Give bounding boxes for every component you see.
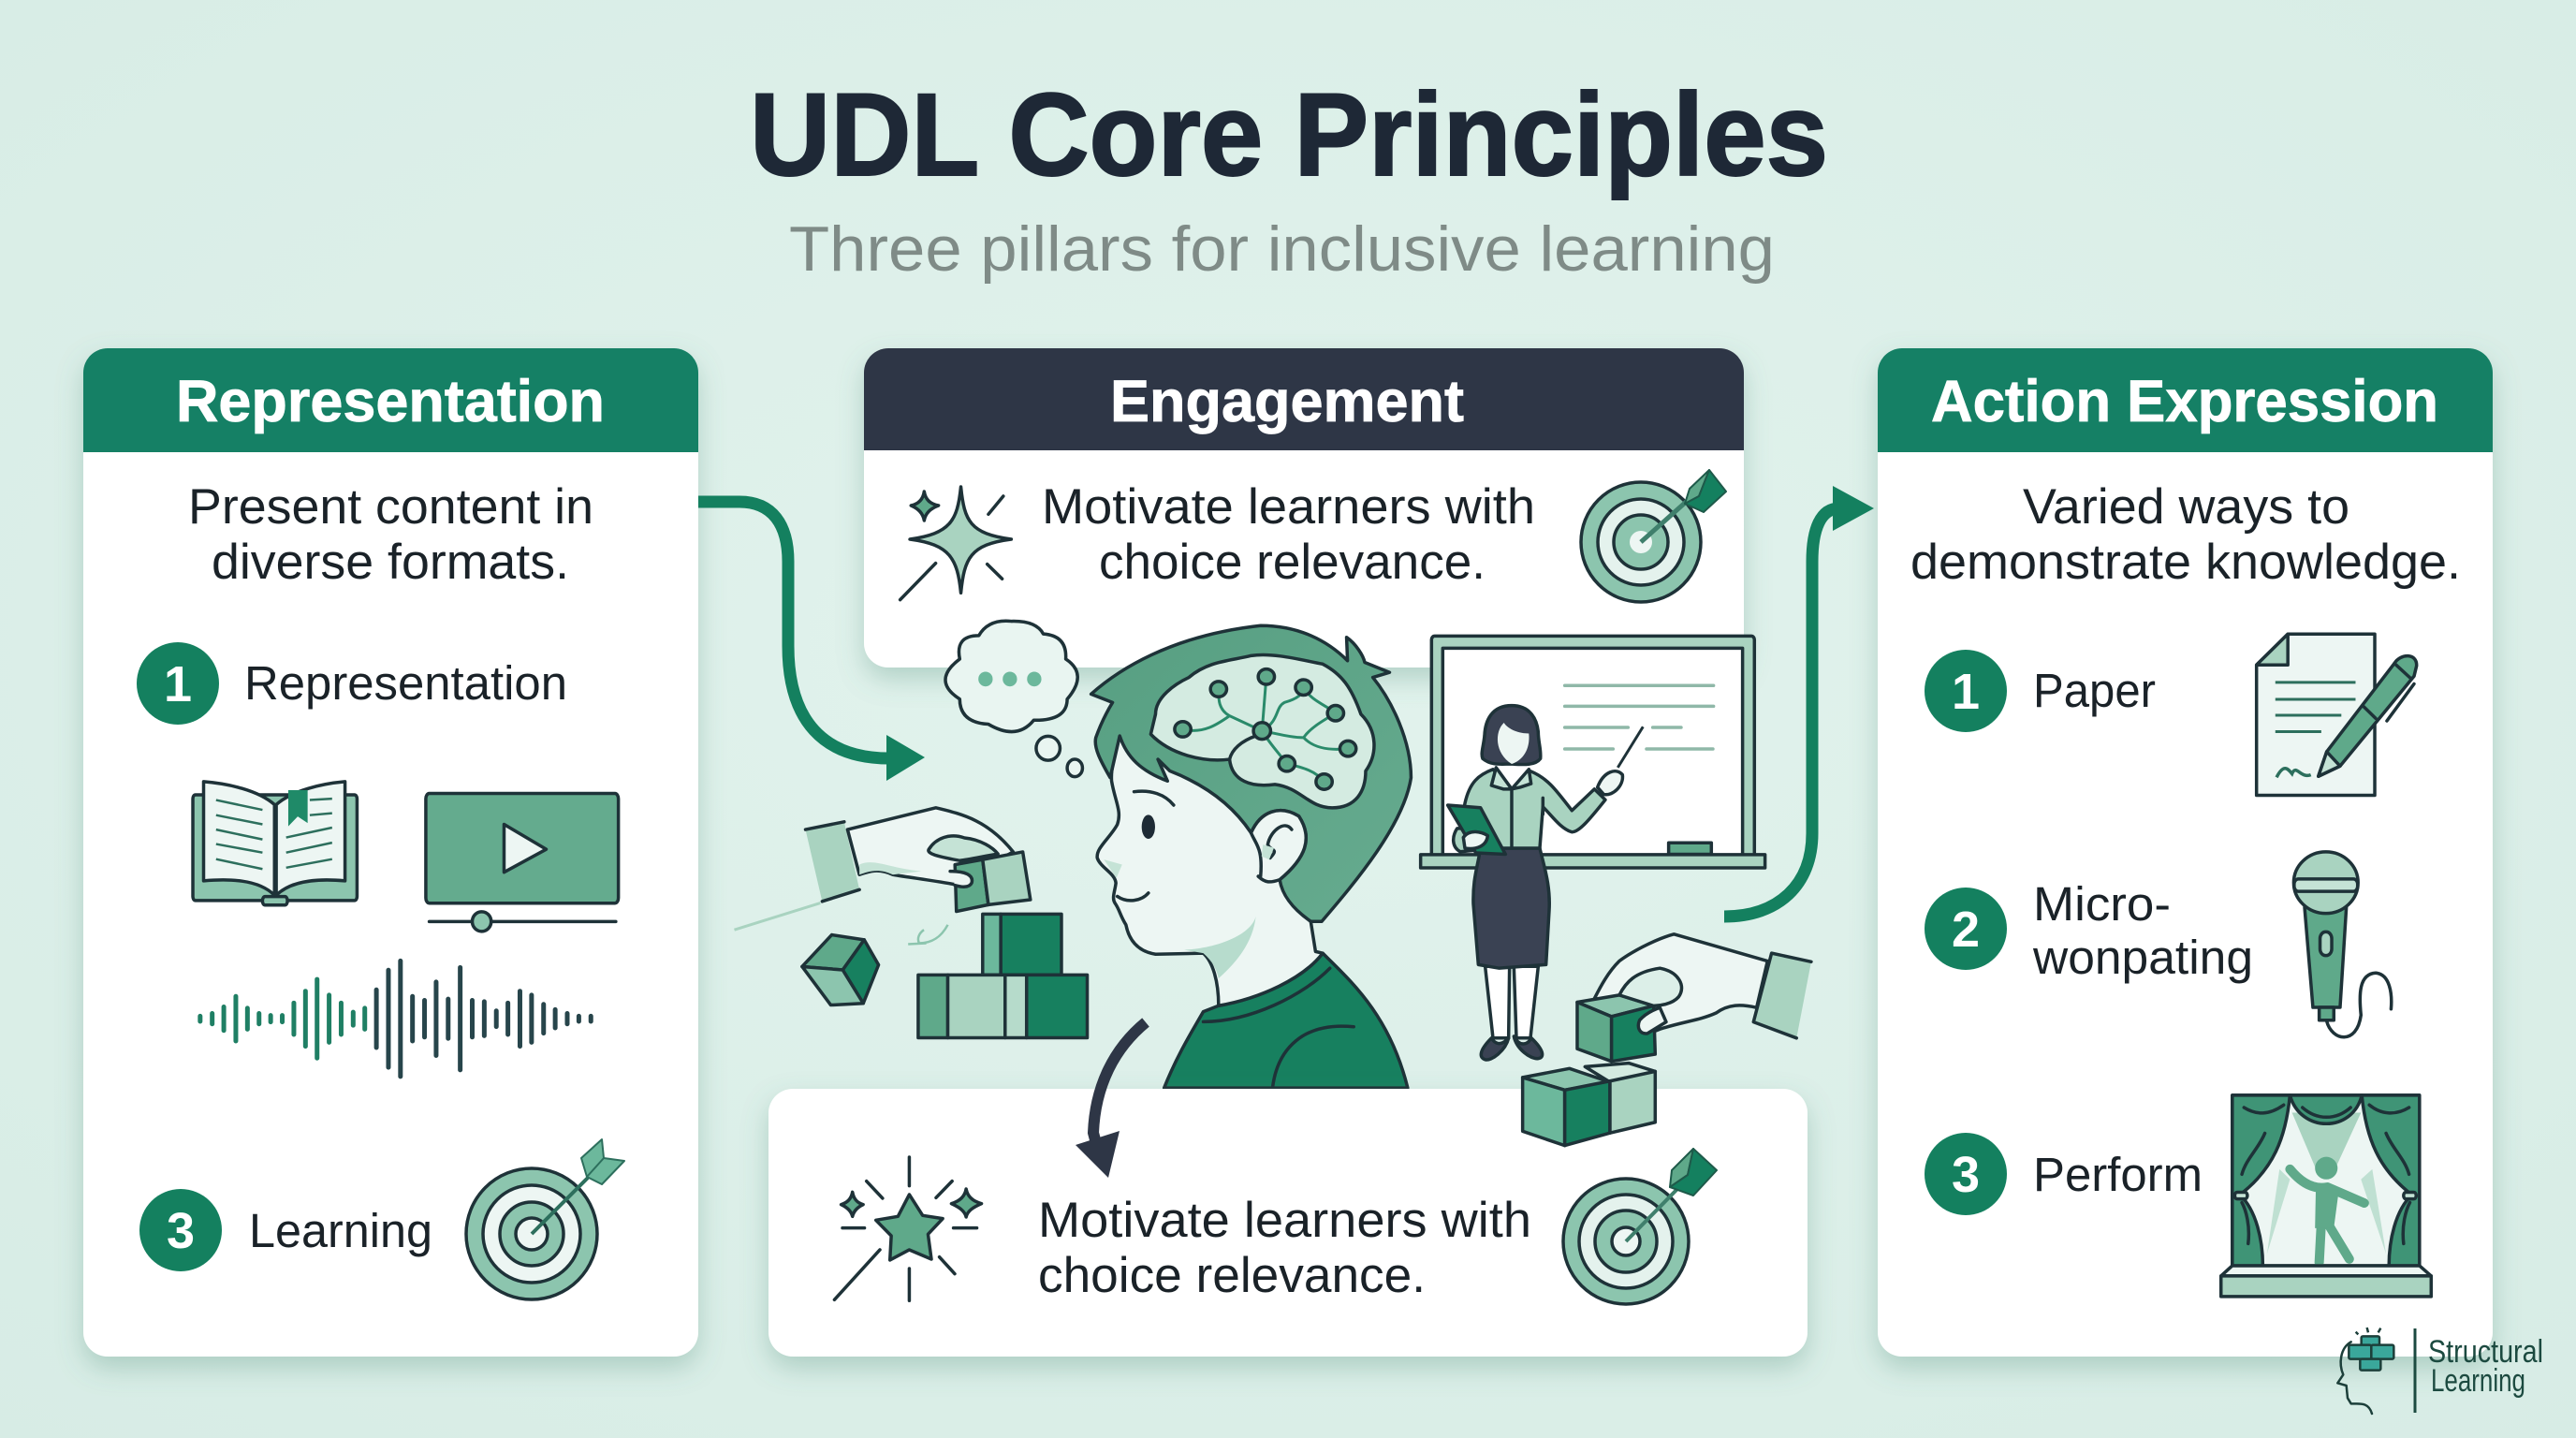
logo text: Structural <box>2428 1334 2543 1370</box>
icon: target left <box>466 1139 624 1299</box>
description: engagement <box>1042 479 1535 590</box>
item 1: representation: 1 <box>164 656 192 712</box>
description: action expression: demonstrate knowledge. <box>1910 535 2461 590</box>
item 1: paper: 1 <box>1952 664 1980 720</box>
description: representation: Present content in <box>188 479 593 535</box>
header: action expression: Action Expression <box>1931 369 2438 434</box>
title: UDL Core Principles <box>750 70 1828 200</box>
item 3: perform: Perform <box>2033 1148 2203 1201</box>
ear <box>1251 811 1306 882</box>
logo text <box>2428 1334 2543 1399</box>
arrow: representation to centre <box>698 502 925 781</box>
face and neck <box>1097 736 1323 1005</box>
icon: star burst <box>834 1157 982 1300</box>
arrow: down to motivation panel <box>1076 1022 1146 1178</box>
item 1: paper: Paper <box>2033 664 2156 717</box>
item 3: learning: Learning <box>249 1204 432 1257</box>
item 1: paper <box>1925 650 2156 732</box>
icon: open book <box>193 782 357 905</box>
logo text: Learning <box>2431 1363 2525 1399</box>
icon: paper and pen <box>2257 634 2417 796</box>
icon: video player <box>426 794 619 932</box>
description: action expression: Varied ways to <box>2023 479 2349 535</box>
teacher <box>1448 706 1622 1060</box>
panel: representation <box>83 348 698 1357</box>
icon: stage with performer <box>2221 1095 2431 1297</box>
description: motivation: Motivate learners with <box>1038 1193 1531 1248</box>
illustration: left hand with blocks <box>734 808 1088 1038</box>
upper block <box>1577 968 1682 1062</box>
whiteboard <box>1421 636 1765 868</box>
item 2: microphone: Micro- <box>2033 877 2171 931</box>
description: representation: diverse formats. <box>212 535 569 590</box>
logo icon <box>2337 1328 2393 1414</box>
illustration: right hand with blocks <box>1523 934 1811 1146</box>
header: engagement <box>864 348 1744 450</box>
description: action expression <box>1910 479 2461 590</box>
block stack <box>918 914 1088 1038</box>
fallen cube <box>802 935 879 1005</box>
panel: action expression <box>1878 348 2493 1357</box>
item 3: perform: 3 <box>1952 1147 1980 1203</box>
panel: motivation <box>768 1089 1808 1357</box>
icon: target bottom <box>1563 1149 1717 1304</box>
item 3: perform <box>1925 1133 2203 1215</box>
thought bubble <box>945 621 1082 777</box>
arrow: centre to action expression <box>1724 486 1874 917</box>
item 3: learning <box>139 1189 432 1271</box>
icon: audio waveform <box>200 961 591 1077</box>
icon: microphone <box>2293 852 2392 1037</box>
hand and cuff <box>1594 934 1811 1038</box>
item 2: microphone: 2 <box>1952 902 1980 958</box>
item 3: learning: 3 <box>167 1203 195 1259</box>
description: representation <box>188 479 593 590</box>
illustration: teacher at whiteboard <box>1421 636 1765 1060</box>
eye <box>1142 814 1155 839</box>
description: motivation: choice relevance. <box>1038 1248 1426 1303</box>
header: action expression <box>1878 348 2493 452</box>
neck shadow <box>1184 917 1256 978</box>
hair <box>1091 625 1411 921</box>
header: representation: Representation <box>176 369 605 434</box>
logo divider <box>2413 1328 2417 1413</box>
description: engagement: choice relevance. <box>1099 535 1486 590</box>
panel: engagement <box>864 348 1744 668</box>
icon: target top <box>1581 470 1726 602</box>
collar line <box>1204 968 1354 1088</box>
eyebrow and smile <box>1118 791 1174 901</box>
item 1: representation <box>137 642 567 725</box>
lower blocks <box>1523 1064 1655 1146</box>
item 1: representation: Representation <box>244 656 567 710</box>
subtitle: Three pillars for inclusive learning <box>789 213 1775 285</box>
description: engagement: Motivate learners with <box>1042 479 1535 535</box>
brain with network <box>1150 655 1374 808</box>
shirt <box>1164 953 1408 1088</box>
item 2: microphone: wonpating <box>2032 931 2253 984</box>
illustration: learner with brain <box>945 621 1411 1088</box>
item 2: microphone <box>1925 877 2253 984</box>
header: representation <box>83 348 698 452</box>
logo: Structural Learning <box>2337 1328 2543 1414</box>
description: motivation <box>1038 1193 1531 1303</box>
header: engagement: Engagement <box>1110 369 1464 434</box>
icon: sparkle <box>900 487 1011 600</box>
